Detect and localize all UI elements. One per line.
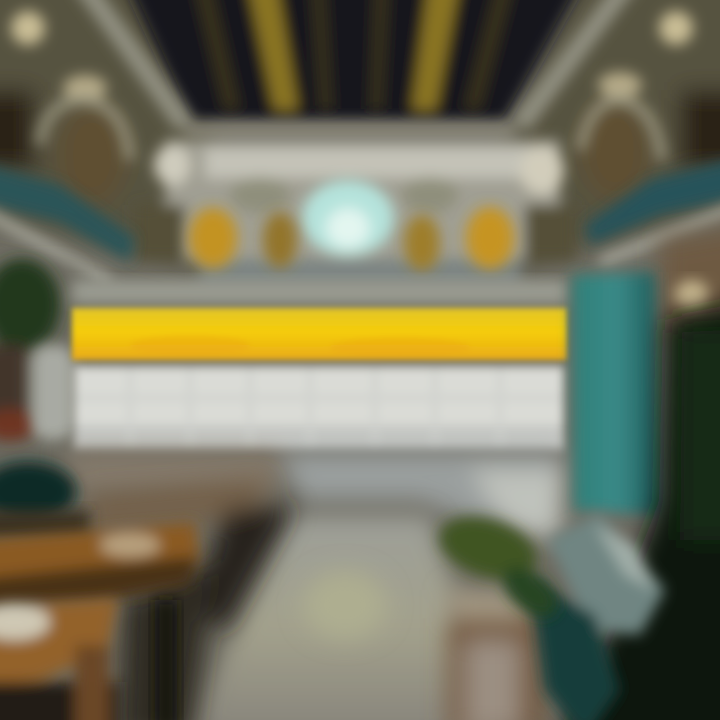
left white pillar <box>32 345 74 440</box>
right upper wall <box>510 0 720 270</box>
right plant dark foliage <box>560 300 720 720</box>
teal diagonal right <box>585 155 720 245</box>
ceiling gold stripes <box>190 0 518 110</box>
band top edge <box>72 280 567 304</box>
white diagonal rails <box>0 208 720 282</box>
yellow band <box>72 308 567 360</box>
right lamp <box>675 280 709 310</box>
ceiling panel with stripes <box>120 0 590 122</box>
lower right wooden stand <box>448 590 543 720</box>
front table upper <box>0 522 200 608</box>
lower left ground <box>0 510 90 540</box>
yellow orbs <box>189 207 514 271</box>
floor <box>185 515 505 720</box>
right teal fronds <box>530 512 665 720</box>
teal panel <box>572 272 662 515</box>
lower right wall beam <box>660 225 720 340</box>
white wall band <box>74 366 564 450</box>
floor highlight <box>303 571 387 639</box>
lamps <box>11 11 693 160</box>
left plant <box>0 259 60 441</box>
central glowing orb <box>302 180 394 256</box>
lower left wall <box>0 270 75 500</box>
table legs <box>155 600 177 720</box>
ceiling beams <box>80 0 630 130</box>
lower back wall <box>60 452 564 540</box>
teal diagonal left <box>0 160 135 262</box>
left upper wall <box>0 0 210 270</box>
left dark seat <box>0 462 76 522</box>
front table lower <box>0 598 120 720</box>
back dining tables <box>85 478 295 720</box>
green plant leaves <box>432 506 566 626</box>
upper wall band <box>135 140 575 288</box>
